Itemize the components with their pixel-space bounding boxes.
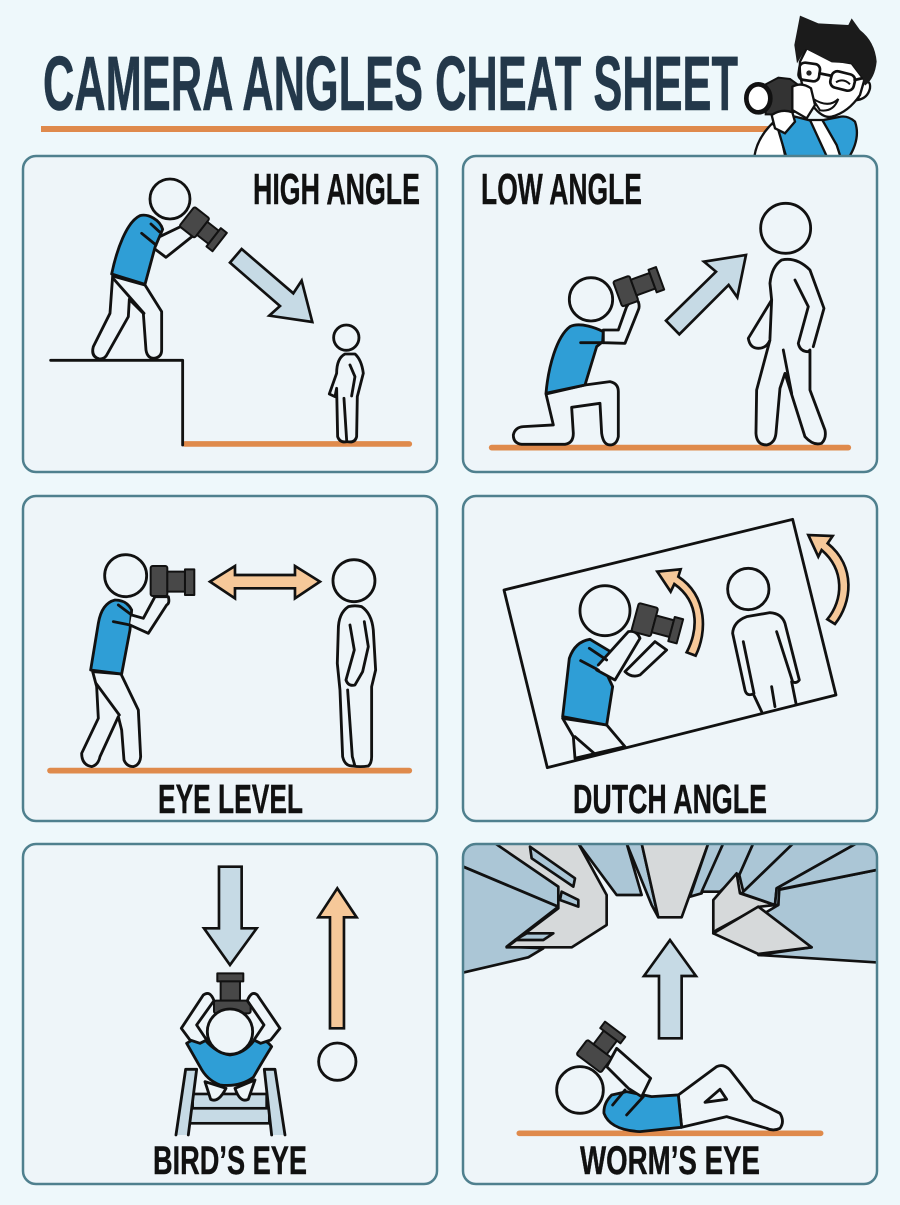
panel: eye level [23, 496, 437, 822]
heading: low angle: LOW ANGLE [481, 165, 642, 214]
heading: worm's eye: WORM’S EYE [580, 1139, 760, 1183]
illustration: kneeling photographer shooting up at tall person [492, 203, 848, 448]
panel: high angle [23, 156, 437, 472]
heading: dutch angle: DUTCH ANGLE [573, 776, 767, 822]
illustration: tilted frame with photographer and subject [504, 519, 848, 768]
panel: bird's eye [23, 844, 437, 1184]
illustration: photographer and subject at same height [50, 555, 409, 771]
illustration: buildings seen from below [460, 843, 880, 973]
icon: photographer mascot [746, 16, 877, 158]
illustration: photographer lying on ground shooting upward [519, 940, 821, 1133]
heading: eye level: EYE LEVEL [158, 776, 303, 822]
illustration: photographer on a ledge shooting down at small person [51, 179, 409, 445]
heading: bird's eye: BIRD’S EYE [153, 1139, 307, 1183]
title underline [41, 126, 771, 132]
heading: high angle: HIGH ANGLE [253, 165, 420, 214]
illustration: photographer on ladder viewed from above [176, 867, 357, 1135]
panel: low angle [463, 156, 877, 472]
panel: worm's eye [460, 843, 880, 1184]
panel: dutch angle [463, 496, 877, 822]
